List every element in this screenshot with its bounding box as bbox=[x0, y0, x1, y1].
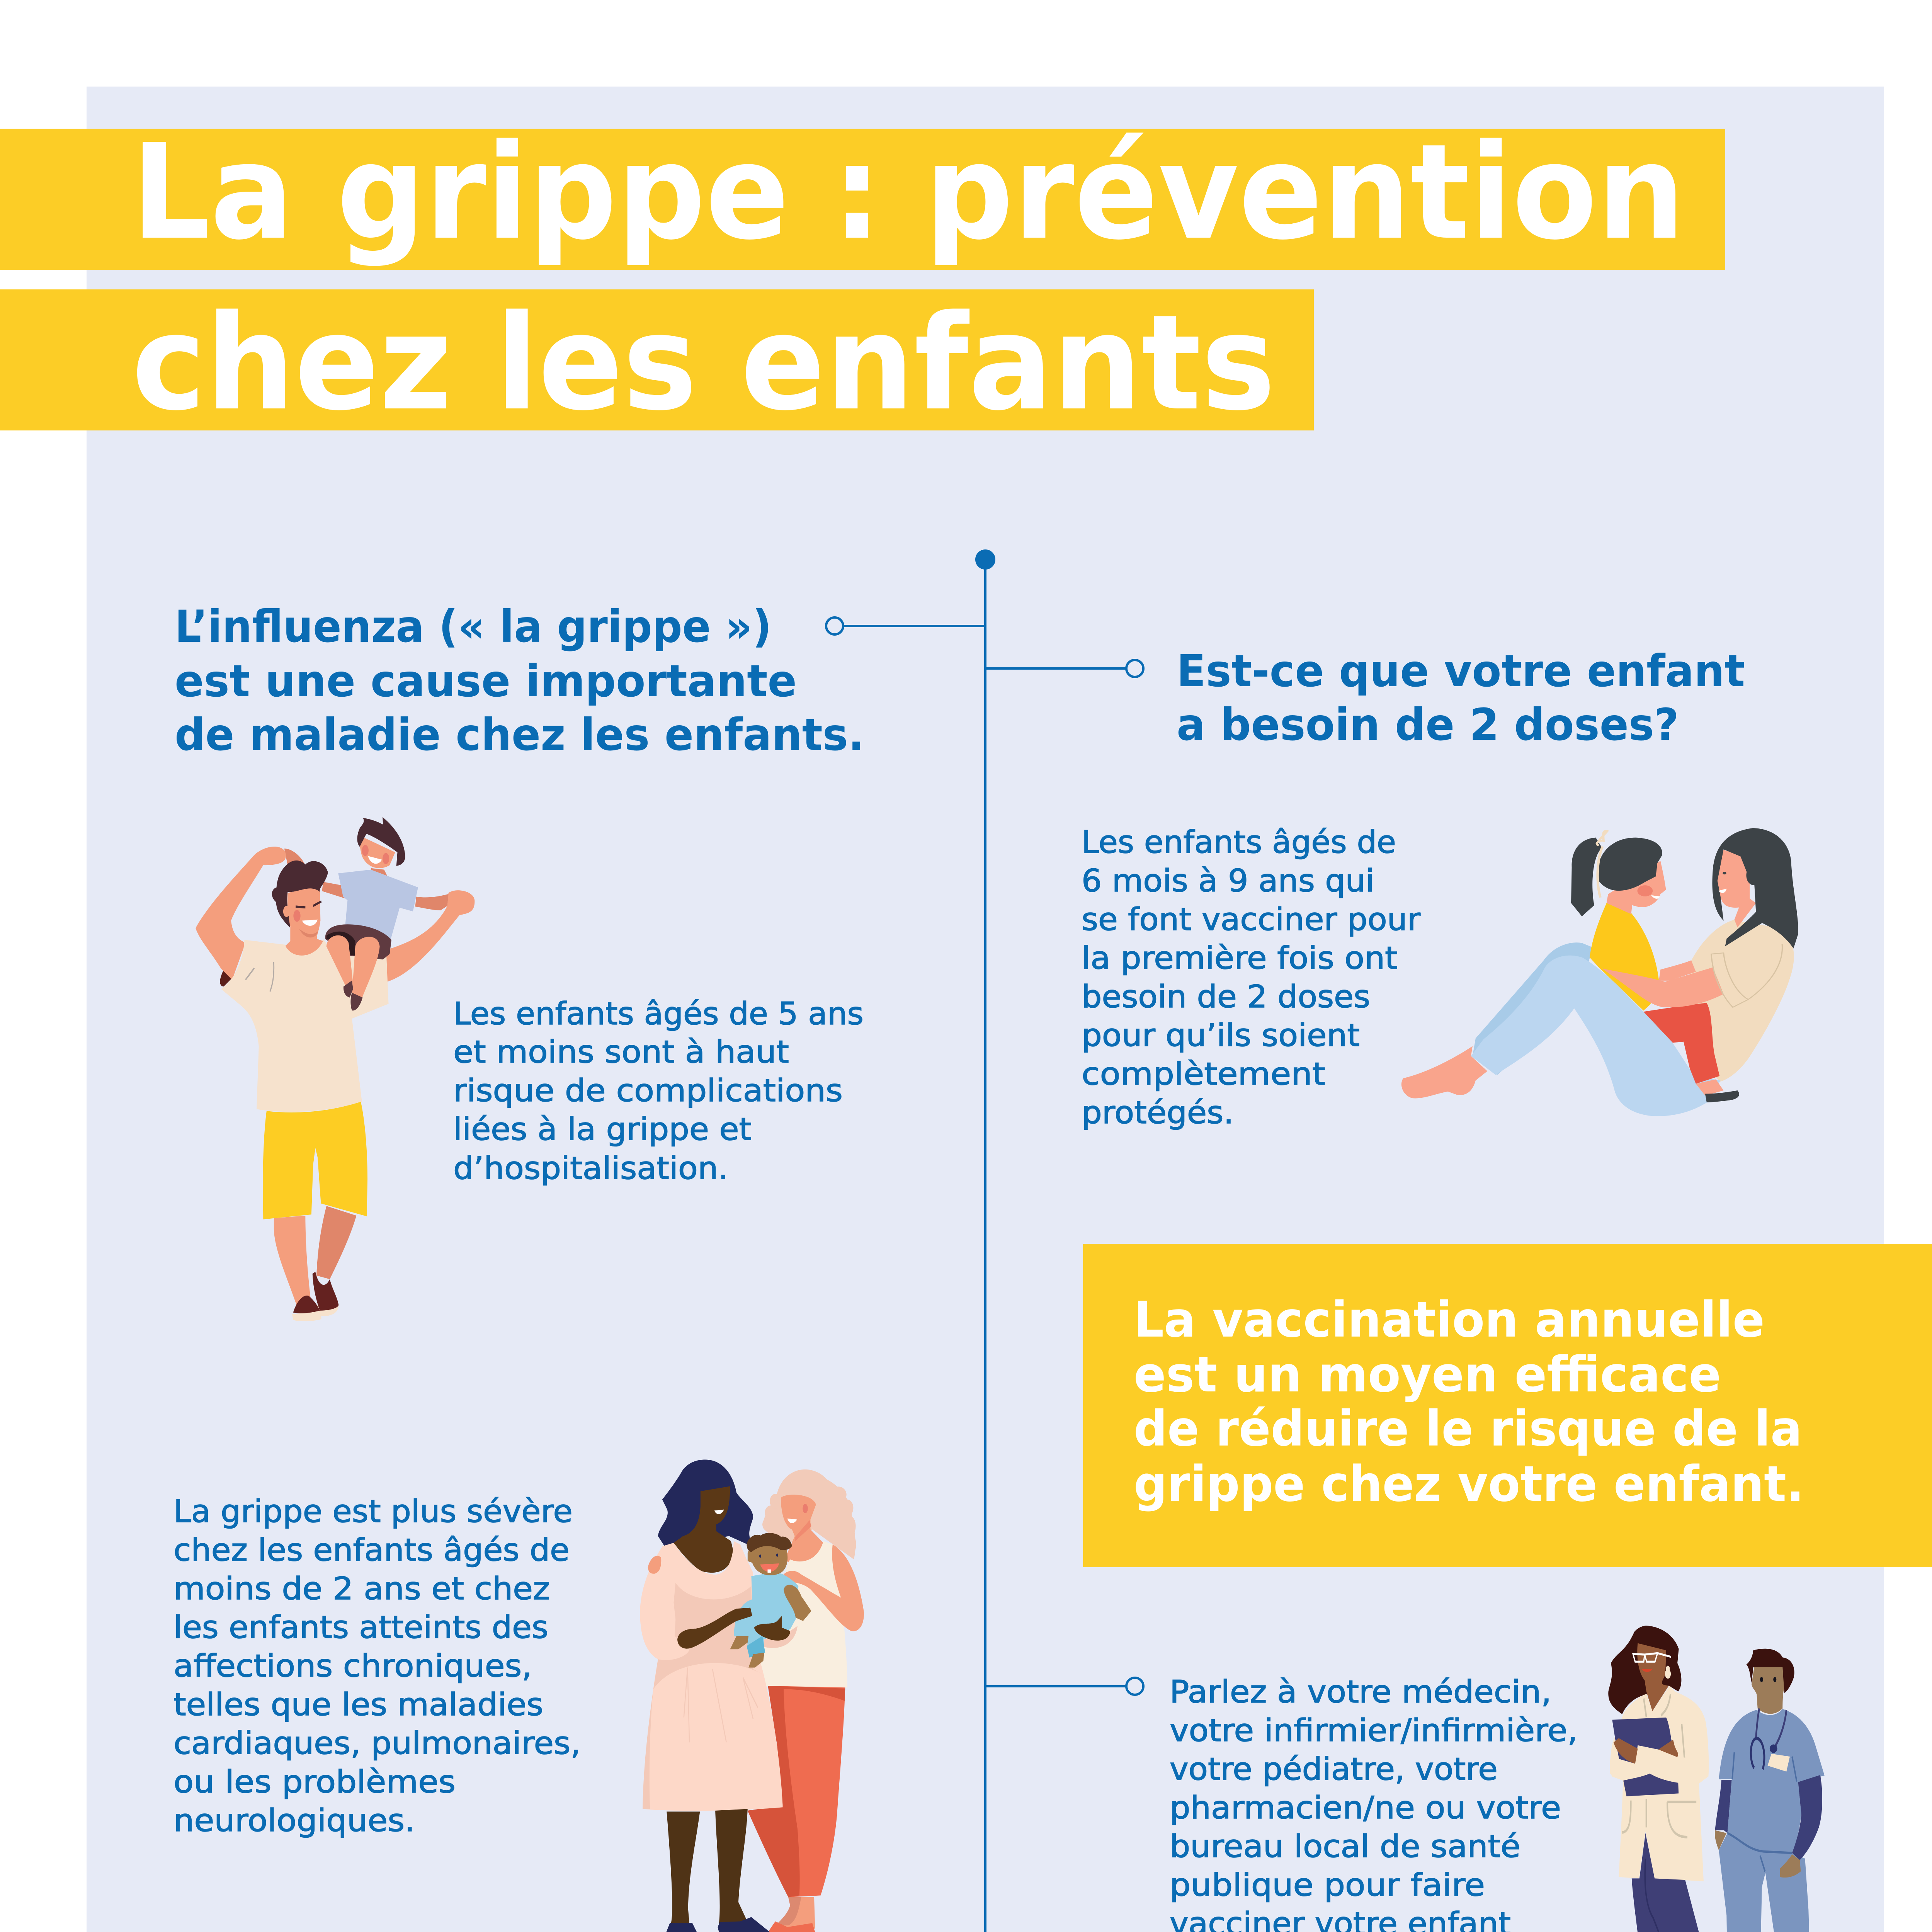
text block: talk to doctor: votre infirmier/infirmière, bbox=[1170, 1713, 1578, 1748]
heading: two doses bbox=[1177, 645, 1745, 750]
text block: two doses detail: Les enfants âgés de bbox=[1082, 824, 1396, 860]
text block: two doses detail: se font vacciner pour bbox=[1082, 901, 1420, 937]
illustration: two women with baby bbox=[640, 1459, 864, 1932]
illustration: mother and daughter bbox=[1401, 828, 1798, 1116]
heading: influenza bbox=[175, 601, 864, 760]
text block: severity: ou les problèmes bbox=[173, 1764, 456, 1800]
text block: under five: liées à la grippe et bbox=[453, 1111, 752, 1147]
text block: talk to doctor: bureau local de santé bbox=[1170, 1828, 1520, 1864]
text block: severity: les enfants atteints des bbox=[173, 1609, 548, 1645]
callout: annual vaccination: grippe chez votre enfant. bbox=[1134, 1455, 1804, 1512]
text block: two doses detail: pour qu’ils soient bbox=[1082, 1017, 1360, 1053]
illustration: father carrying child bbox=[196, 817, 474, 1321]
text block: severity bbox=[173, 1493, 581, 1838]
callout: annual vaccination: La vaccination annuelle bbox=[1134, 1291, 1765, 1348]
text block: under five: d’hospitalisation. bbox=[453, 1150, 728, 1186]
callout: annual vaccination bbox=[1083, 1244, 1932, 1567]
text block: talk to doctor: votre pédiatre, votre bbox=[1170, 1751, 1498, 1787]
text block: under five: et moins sont à haut bbox=[453, 1034, 789, 1070]
text block: two doses detail: complètement bbox=[1082, 1056, 1325, 1092]
callout: annual vaccination: de réduire le risque de la bbox=[1134, 1400, 1802, 1457]
text block: severity: chez les enfants âgés de bbox=[173, 1532, 570, 1568]
heading: influenza: L’influenza (« la grippe ») bbox=[175, 601, 772, 652]
text block: two doses detail: protégés. bbox=[1082, 1095, 1234, 1131]
illustration: doctor and nurse bbox=[1608, 1626, 1825, 1932]
text block: severity: affections chroniques, bbox=[173, 1648, 532, 1684]
heading: influenza: est une cause importante bbox=[175, 655, 797, 707]
callout: annual vaccination: est un moyen efficace bbox=[1134, 1346, 1721, 1403]
text block: talk to doctor: pharmacien/ne ou votre bbox=[1170, 1790, 1561, 1826]
heading: two doses: a besoin de 2 doses? bbox=[1177, 699, 1679, 750]
text block: two doses detail: 6 mois à 9 ans qui bbox=[1082, 863, 1374, 899]
text block: under five bbox=[453, 996, 864, 1186]
text block: under five: Les enfants âgés de 5 ans bbox=[453, 996, 864, 1032]
timeline with connectors bbox=[826, 551, 1143, 1932]
title: chez les enfants bbox=[132, 287, 1276, 440]
text block: severity: moins de 2 ans et chez bbox=[173, 1571, 550, 1607]
text block: two doses detail: besoin de 2 doses bbox=[1082, 979, 1370, 1015]
text block: two doses detail: la première fois ont bbox=[1082, 940, 1398, 976]
heading: influenza: de maladie chez les enfants. bbox=[175, 709, 864, 760]
text block: two doses detail bbox=[1082, 824, 1420, 1131]
text block: severity: La grippe est plus sévère bbox=[173, 1493, 573, 1529]
text block: talk to doctor: Parlez à votre médecin, bbox=[1170, 1674, 1551, 1710]
text block: talk to doctor: publique pour faire bbox=[1170, 1867, 1485, 1903]
text block: under five: risque de complications bbox=[453, 1073, 843, 1109]
text block: severity: telles que les maladies bbox=[173, 1687, 543, 1723]
text block: severity: neurologiques. bbox=[173, 1803, 415, 1838]
heading: two doses: Est-ce que votre enfant bbox=[1177, 645, 1745, 697]
title: La grippe : prévention bbox=[131, 116, 1685, 269]
text block: talk to doctor bbox=[1170, 1674, 1578, 1932]
text block: severity: cardiaques, pulmonaires, bbox=[173, 1725, 581, 1761]
title bbox=[0, 116, 1725, 440]
